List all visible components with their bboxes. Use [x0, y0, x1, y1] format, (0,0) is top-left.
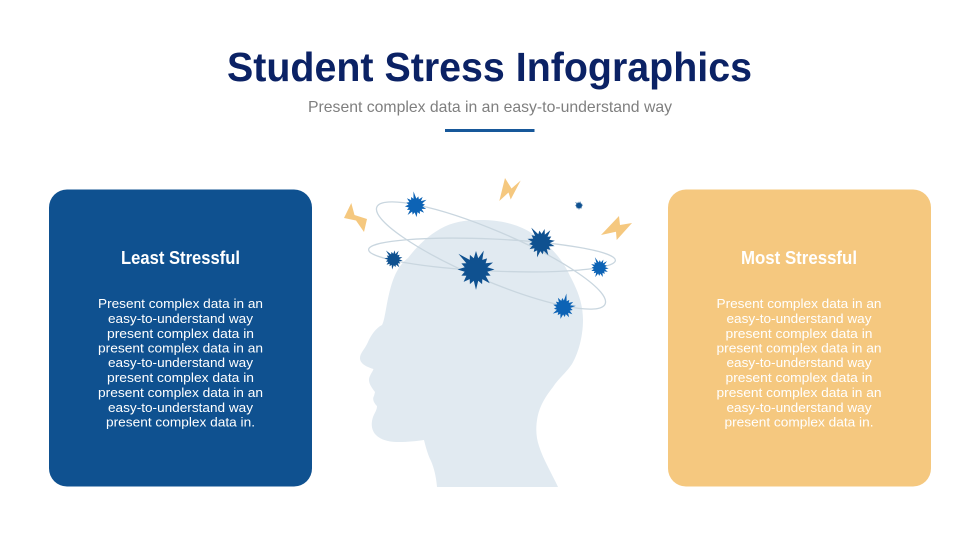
text block: most stressful: present complex data in.	[724, 414, 874, 430]
orbit rings	[367, 184, 616, 327]
text block: least stressful: Present complex data in an	[98, 296, 263, 311]
text block: least stressful: present complex data in	[107, 370, 254, 385]
text block: least stressful: easy-to-understand way	[108, 400, 254, 415]
text block: most stressful: present complex data in an	[716, 385, 882, 400]
text block: least stressful	[98, 296, 263, 430]
text block: most stressful	[716, 296, 882, 430]
heading: most stressful: Most Stressful	[741, 248, 857, 268]
text block: least stressful: easy-to-understand way	[108, 355, 254, 370]
panel: most stressful	[668, 190, 931, 486]
head silhouette	[360, 220, 583, 487]
illustration: stressed head	[344, 178, 632, 487]
text block: most stressful: present complex data in an	[716, 340, 882, 356]
text block: least stressful: easy-to-understand way	[108, 311, 254, 326]
subtitle: Present complex data in an easy-to-understand way	[308, 99, 672, 116]
text block: least stressful: present complex data in an	[98, 340, 263, 356]
stars	[383, 190, 612, 323]
text block: most stressful: present complex data in	[726, 326, 872, 341]
lightning bolts	[344, 178, 632, 240]
text block: most stressful: easy-to-understand way	[726, 311, 872, 326]
text block: least stressful: present complex data in an	[98, 385, 263, 400]
panel: least stressful	[49, 190, 312, 486]
text block: most stressful: Present complex data in an	[716, 296, 882, 311]
text block: most stressful: easy-to-understand way	[726, 400, 872, 415]
text block: least stressful: present complex data in.	[106, 414, 255, 430]
text block: most stressful: easy-to-understand way	[726, 355, 872, 370]
title underline	[445, 129, 534, 132]
text block: least stressful: present complex data in	[107, 326, 254, 341]
heading: least stressful: Least Stressful	[121, 248, 240, 268]
text block: most stressful: present complex data in	[726, 370, 872, 385]
title: Student Stress Infographics	[227, 44, 752, 90]
